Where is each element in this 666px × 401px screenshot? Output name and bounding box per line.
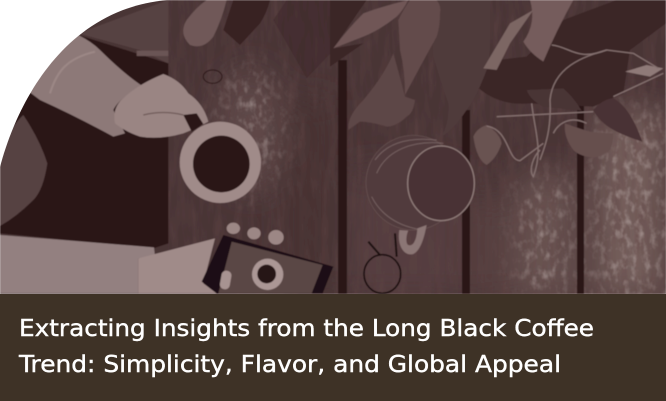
title text [18, 316, 594, 378]
lower sleeve [0, 235, 155, 293]
right side: plants and glassware [330, 0, 666, 293]
grey surface above arm [78, 0, 168, 63]
top center leaf [523, 0, 573, 62]
photo: overhead view of coffee on wooden table [0, 0, 666, 300]
eyeglass arm [368, 233, 397, 257]
phone screen coffee [257, 265, 276, 283]
torso shoulder [0, 115, 47, 226]
wooden table background [0, 0, 666, 300]
jug ribs [372, 139, 443, 230]
cuff fold [50, 52, 95, 93]
plank gaps [338, 60, 584, 294]
dark clothing [0, 35, 168, 248]
finger shadows [143, 112, 183, 115]
title line 2: Trend: Simplicity, Flavor, and Global Appeal [18, 352, 561, 378]
upper sleeve [27, 35, 143, 137]
left side: person and arms [0, 0, 340, 293]
big central leaf [462, 70, 486, 116]
coffee [193, 136, 250, 192]
small hanging leaf [473, 125, 502, 165]
dark foliage mass [473, 0, 666, 107]
jug handle [399, 225, 427, 254]
fingers [227, 223, 284, 245]
top light leaf [333, 0, 408, 48]
coffee cup [180, 122, 261, 203]
stem blade [483, 10, 533, 70]
glass jug [366, 135, 474, 254]
small right leaf [625, 65, 663, 77]
middle leaf [398, 0, 440, 95]
title line 1: Extracting Insights from the Long Black Coffee [19, 316, 594, 342]
phone screen cup [252, 259, 283, 290]
wood grain texture [168, 1, 644, 270]
smartphone [202, 235, 333, 293]
top leaves above table [183, 0, 227, 46]
shadow band on table edge [137, 51, 168, 56]
mid dark leaf [527, 88, 582, 111]
vines [487, 45, 663, 177]
jug body [366, 135, 461, 230]
cup handle [183, 113, 203, 132]
title banner [0, 294, 666, 401]
wood weathering specks [210, 60, 666, 294]
jug rim [408, 146, 474, 221]
phone screen button [219, 270, 232, 290]
hand holding cup [114, 74, 208, 138]
dark leaf [593, 98, 642, 142]
small eyeglass mark [203, 70, 222, 83]
lower hand [138, 238, 217, 293]
phone screen [218, 242, 323, 293]
dark top left foliage [330, 0, 367, 67]
eyeglasses [364, 255, 401, 293]
left leaf [348, 53, 415, 130]
lower hanging leaves [565, 123, 613, 157]
